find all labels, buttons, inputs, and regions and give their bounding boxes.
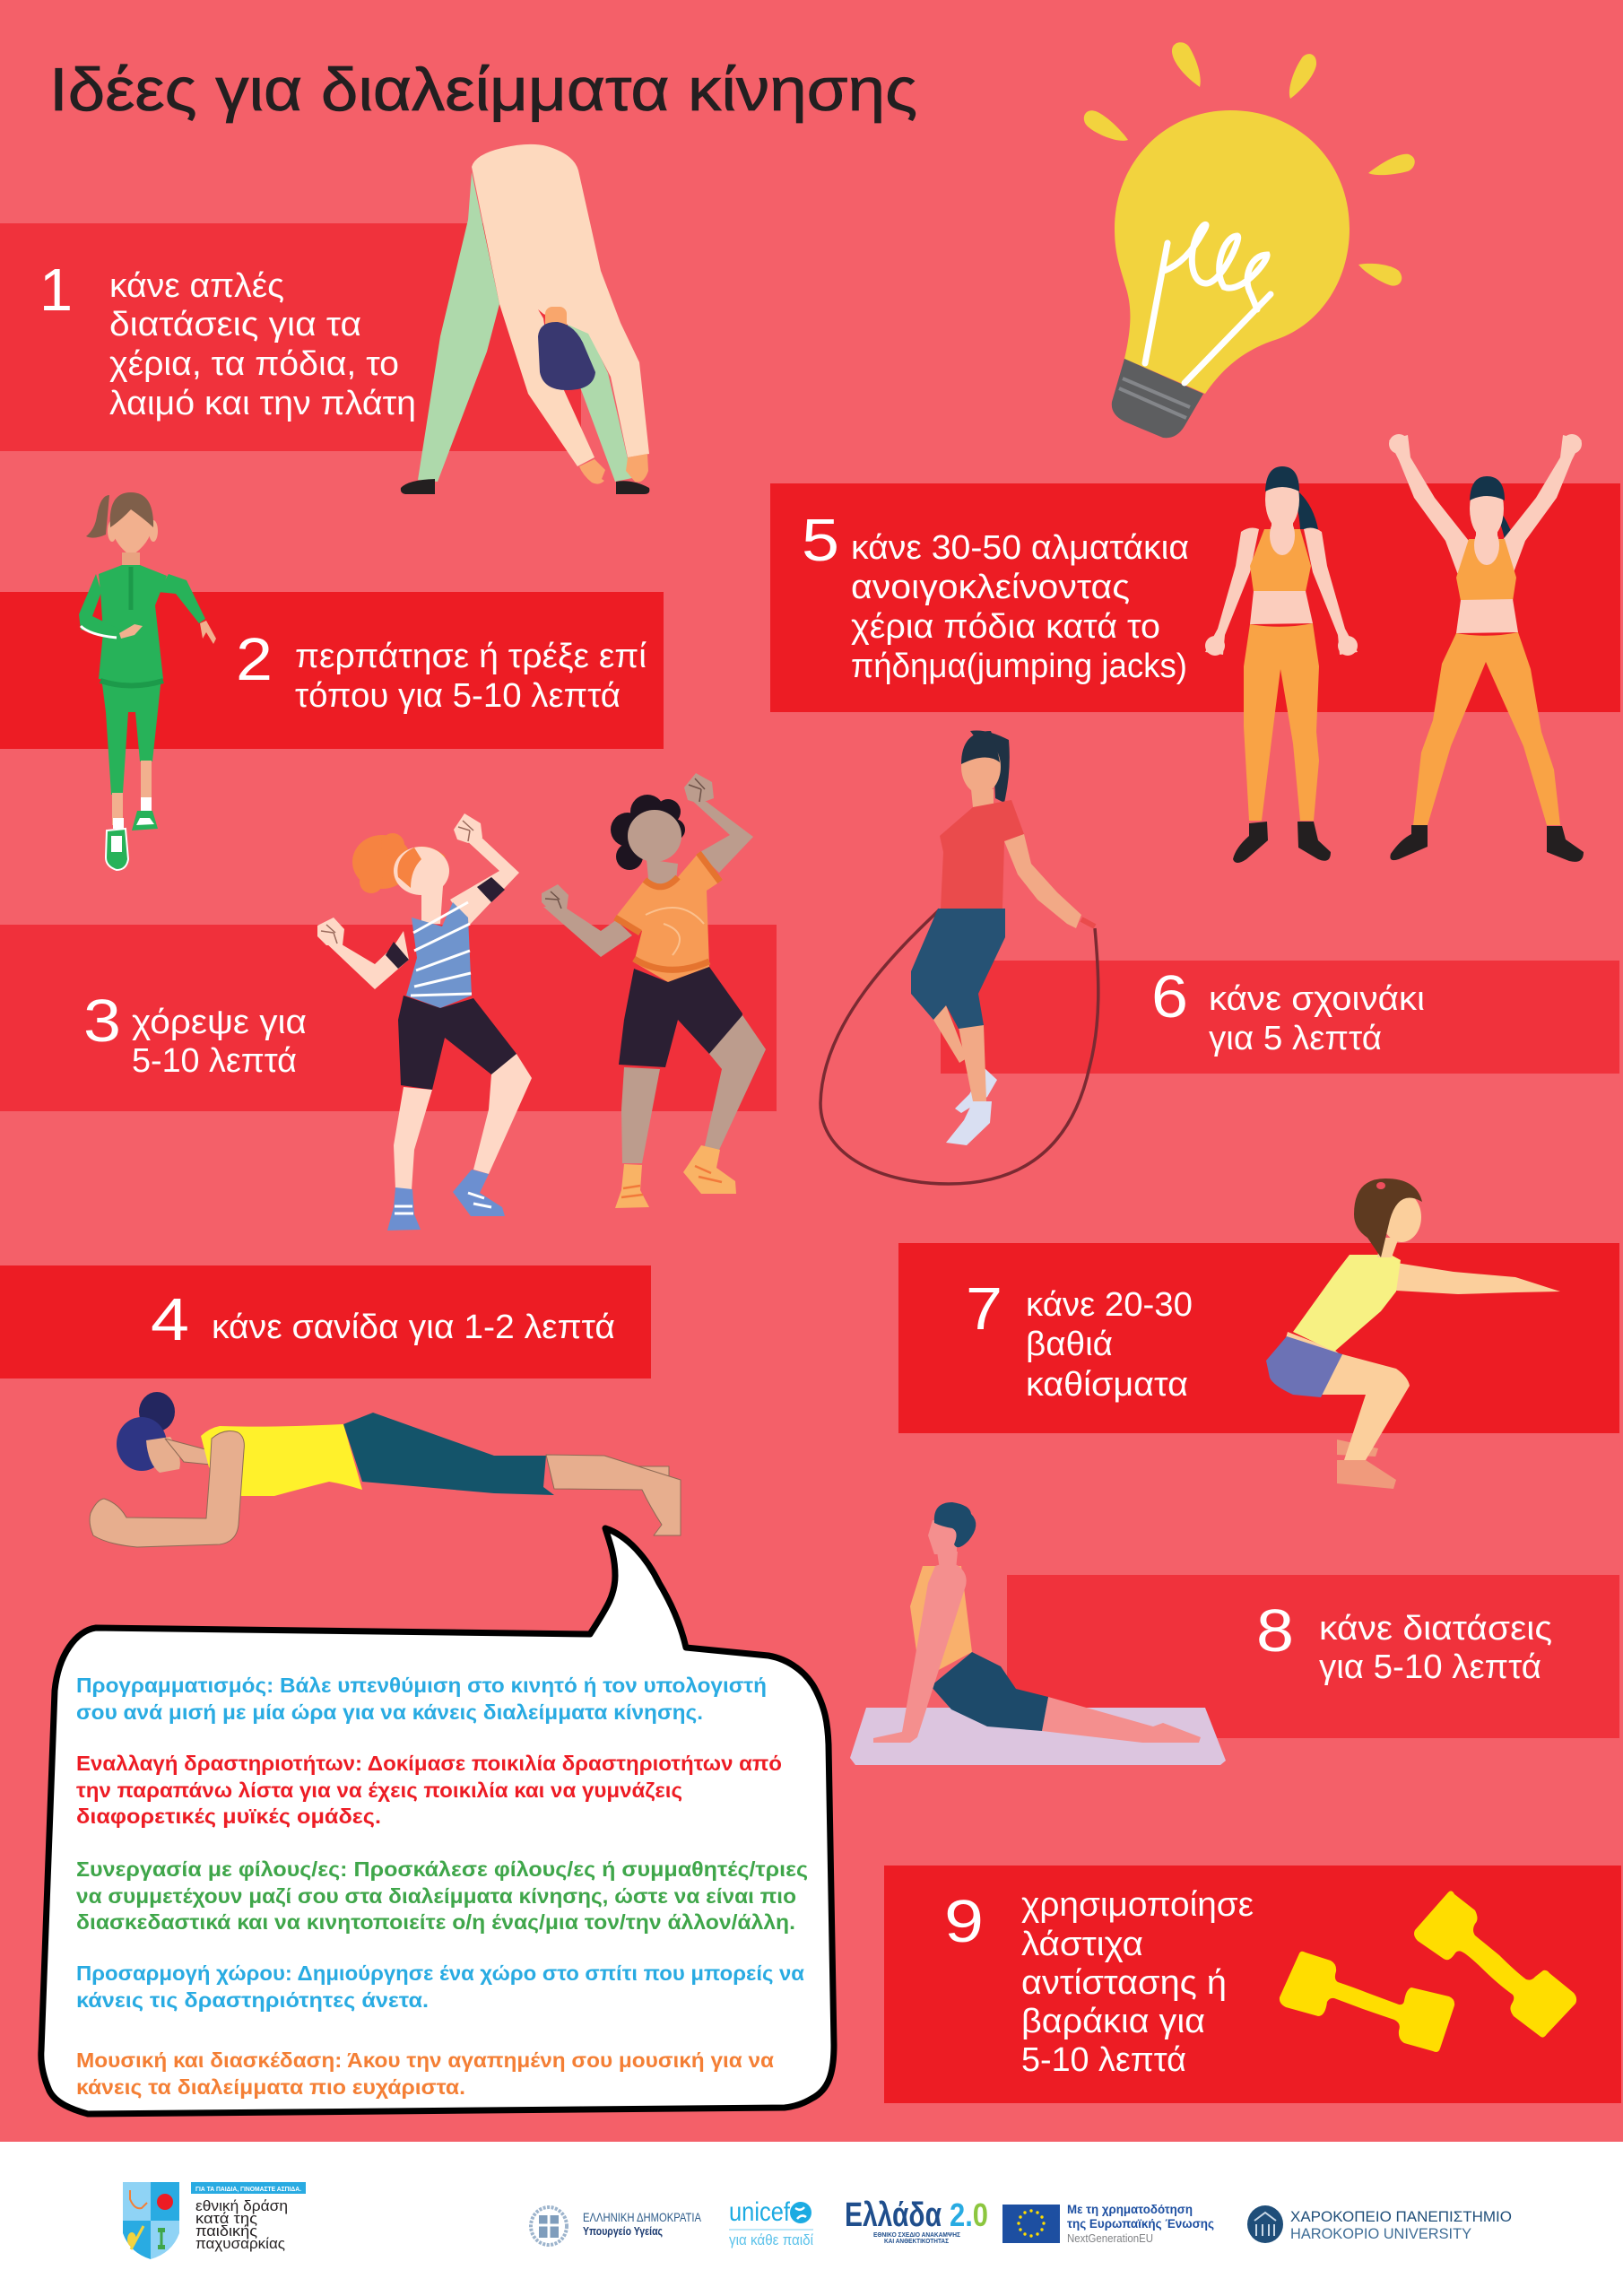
number 4: 4: [151, 1286, 189, 1353]
text 1: διατάσεις για τα: [109, 306, 361, 344]
panel 6: jump rope: [941, 961, 1619, 1074]
tip: music: [76, 2048, 774, 2099]
text 5: κάνε 30-50 αλματάκια: [851, 529, 1189, 567]
figure: jump rope: [820, 730, 1098, 1184]
figure: plank: [90, 1392, 681, 1547]
text 6: κάνε σχοινάκι: [1209, 980, 1425, 1018]
logo: unicef: [729, 2197, 813, 2248]
tip: space adjustment: Προσαρμογή χώρου: Δημιούργησε ένα χώρο στο σπίτι που μπορείς να: [76, 1961, 804, 1985]
logo: Harokopio University: [1247, 2205, 1512, 2243]
figure: jumping jacks arms down: [1205, 466, 1358, 863]
logo: Harokopio University: ΧΑΡΟΚΟΠΕΙΟ ΠΑΝΕΠΙΣΤΗΜΙΟ: [1290, 2208, 1512, 2225]
logo: Harokopio University: HAROKOPIO UNIVERSITY: [1290, 2225, 1471, 2242]
text 1: [109, 267, 416, 422]
text 5: [851, 529, 1189, 685]
logo: EU funding flag: Με τη χρηματοδότηση: [1067, 2202, 1193, 2216]
text 1: χέρια, τα πόδια, το: [109, 345, 399, 383]
logo: national action shield: κατά της: [195, 2210, 257, 2227]
number 8: 8: [1256, 1597, 1294, 1665]
text 7: καθίσματα: [1026, 1366, 1188, 1404]
callout: speech bubble with tips: [41, 1528, 834, 2114]
tip: cooperation with friends: να συμμετέχουν μαζί σου στα διαλείμματα κίνησης, ώστε να είναι πιο: [76, 1884, 796, 1908]
logo: unicef: για κάθε παιδί: [729, 2231, 813, 2248]
figure: dancer with red hair: [317, 813, 532, 1231]
text 8: για 5-10 λεπτά: [1319, 1648, 1541, 1686]
figure: forward fold stretch: [401, 144, 649, 494]
number 7: 7: [966, 1275, 1002, 1343]
text 5: χέρια πόδια κατά το: [851, 608, 1160, 646]
panel 2: walk or run: [0, 592, 664, 749]
logo: national action shield: παιδικής: [195, 2222, 257, 2239]
figure: walker in green: [79, 492, 216, 870]
logo: ministry of health: ΕΛΛΗΝΙΚΗ ΔΗΜΟΚΡΑΤΙΑ: [583, 2210, 702, 2224]
logo: national action shield: [123, 2182, 306, 2259]
panel 9: weights: [884, 1866, 1621, 2103]
logo: EU funding flag: της Ευρωπαϊκής Ένωσης: [1067, 2216, 1214, 2231]
figure: jumping jacks arms up: [1389, 434, 1584, 862]
text 1: κάνε απλές: [109, 267, 284, 305]
tip: scheduling: σου ανά μισή με μία ώρα για να κάνεις διαλείμματα κίνησης.: [76, 1700, 703, 1724]
text 6: για 5 λεπτά: [1209, 1020, 1382, 1057]
number 2: 2: [236, 626, 273, 693]
panel 8: stretching: [1007, 1575, 1619, 1738]
text 9: [1021, 1886, 1254, 2079]
text 3: χόρεψε για: [132, 1004, 307, 1041]
footer logos: [123, 2182, 1512, 2259]
icon: dumbbells: [1280, 1891, 1576, 2052]
text 9: αντίστασης ή: [1021, 1964, 1227, 2002]
tip: variety: [76, 1752, 782, 1828]
number 5: 5: [802, 507, 839, 574]
tip: space adjustment: [76, 1961, 804, 2012]
text 3: 5-10 λεπτά: [132, 1042, 297, 1080]
figure: dancer with dark curly hair: [542, 773, 766, 1208]
number 9: 9: [944, 1888, 984, 1955]
text 9: 5-10 λεπτά: [1021, 2041, 1186, 2079]
text 4: κάνε σανίδα για 1-2 λεπτά: [212, 1309, 615, 1346]
text 5: ανοιγοκλείνοντας: [851, 569, 1130, 606]
bulb rays: [1084, 42, 1415, 286]
text 7: [1026, 1286, 1193, 1404]
logo: national action shield: ΓΙΑ ΤΑ ΠΑΙΔΙΑ, ΓΙΝΟΜΑΣΤΕ ΑΣΠΙΔΑ.: [195, 2185, 301, 2193]
number 3: 3: [83, 987, 121, 1055]
tip: scheduling: [76, 1674, 767, 1724]
logo: Greece 2.0: ΕΘΝΙΚΟ ΣΧΕΔΙΟ ΑΝΑΚΑΜΨΗΣ: [873, 2231, 960, 2239]
text 7: βαθιά: [1026, 1326, 1113, 1363]
panel 3: dance: [0, 925, 777, 1111]
text 2: τόπου για 5-10 λεπτά: [295, 677, 621, 715]
text 9: λάστιχα: [1021, 1926, 1143, 1963]
logo: Greece 2.0: Ελλάδα: [845, 2196, 942, 2234]
text 5: πήδημα(jumping jacks): [851, 648, 1187, 685]
text 2: περπάτησε ή τρέξε επί: [295, 638, 647, 675]
text 2: [295, 638, 647, 715]
number 1: 1: [39, 257, 73, 324]
text 3: [132, 1004, 307, 1080]
text 1: λαιμό και την πλάτη: [109, 385, 416, 422]
logo: ministry of health: Υπουργείο Υγείας: [583, 2224, 663, 2238]
logo: EU funding flag: NextGenerationEU: [1067, 2231, 1153, 2245]
tip: variety: διαφορετικές μυϊκές ομάδες.: [76, 1805, 381, 1828]
text 6: [1209, 980, 1425, 1057]
tip: variety: Εναλλαγή δραστηριοτήτων: Δοκίμασε ποικιλία δραστηριοτήτων από: [76, 1752, 782, 1775]
tip: variety: την παραπάνω λίστα για να έχεις ποικιλία και να γυμνάζεις: [76, 1779, 682, 1802]
logo: ministry of health: [531, 2207, 702, 2245]
logo: national action shield: παχυσαρκίας: [195, 2235, 285, 2252]
text 8: κάνε διατάσεις: [1319, 1610, 1552, 1648]
raised arm and fist: [684, 773, 753, 873]
title: Ιδέες για διαλείμματα κίνησης: [49, 56, 917, 124]
logo: EU funding flag: [1002, 2202, 1214, 2245]
tip: music: κάνεις τα διαλείμματα πιο ευχάριστα.: [76, 2075, 465, 2099]
tip: scheduling: Προγραμματισμός: Βάλε υπενθύμιση στο κινητό ή τον υπολογιστή: [76, 1674, 767, 1697]
tip: space adjustment: κάνεις τις δραστηριότητες άνετα.: [76, 1988, 429, 2012]
figure: squat: [1266, 1178, 1560, 1489]
panel 5: jumping jacks: [770, 483, 1620, 712]
text 8: [1319, 1610, 1552, 1686]
text 7: κάνε 20-30: [1026, 1286, 1193, 1324]
raised arm and fist: [450, 813, 519, 926]
text 9: βαράκια για: [1021, 2003, 1205, 2040]
logo: unicef: unicef: [729, 2197, 791, 2227]
logo: Greece 2.0: [845, 2196, 988, 2245]
logo: national action shield: εθνική δράση: [195, 2197, 288, 2214]
figure: cobra stretch on mat: [850, 1502, 1226, 1765]
tip: cooperation with friends: διασκεδαστικά και να κινητοποιείτε ο/η ένας/μια τον/την άλλον/άλλη.: [76, 1910, 795, 1934]
icon: light bulb: [1084, 42, 1415, 438]
text 9: χρησιμοποίησε: [1021, 1886, 1254, 1924]
number 6: 6: [1151, 963, 1188, 1031]
tip: cooperation with friends: Συνεργασία με φίλους/ες: Προσκάλεσε φίλους/ες ή συμμαθητές/τριες: [76, 1857, 808, 1881]
logo: Greece 2.0: 2.0: [950, 2196, 988, 2233]
panel 4: plank: [0, 1265, 651, 1378]
panel 1: stretches: [0, 223, 581, 451]
tip: cooperation with friends: [76, 1857, 808, 1934]
tip: music: Μουσική και διασκέδαση: Άκου την αγαπημένη σου μουσική για να: [76, 2048, 774, 2072]
logo: Greece 2.0: ΚΑΙ ΑΝΘΕΚΤΙΚΟΤΗΤΑΣ: [884, 2237, 949, 2245]
panel 7: squats: [898, 1243, 1619, 1433]
